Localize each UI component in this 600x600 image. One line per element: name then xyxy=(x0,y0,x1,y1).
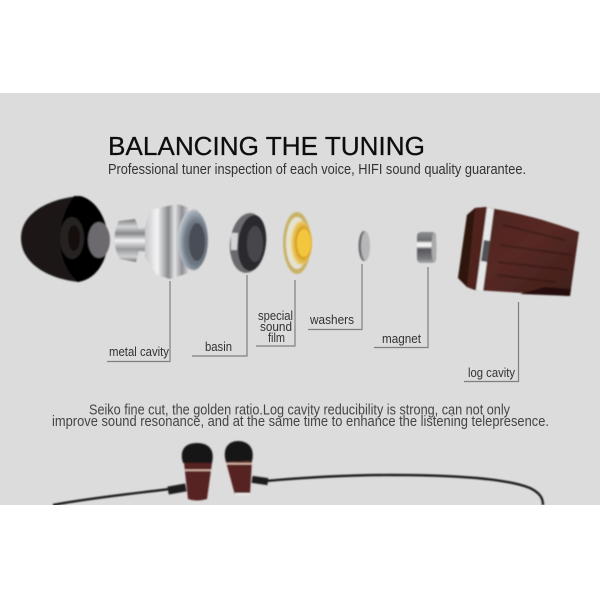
description text: improve sound resonance, and at the same time to enhance the listening telepresence. xyxy=(52,414,549,430)
grey panel xyxy=(0,93,600,505)
earphones photo xyxy=(53,441,543,505)
icon: washers xyxy=(358,231,370,261)
callout: special sound film: sound xyxy=(260,320,292,334)
icon: silicone ear tip xyxy=(21,196,110,282)
left band xyxy=(184,470,211,471)
icon: special sound film xyxy=(283,212,312,274)
bottom white strip xyxy=(0,505,600,600)
right wood body xyxy=(226,461,252,495)
right band xyxy=(226,463,252,464)
callout: magnet xyxy=(374,267,428,348)
left ear tip xyxy=(182,443,213,463)
callout: metal cavity xyxy=(107,281,170,362)
icon: magnet xyxy=(417,232,436,263)
callout: special sound film: film xyxy=(268,331,285,345)
callout: special sound film xyxy=(256,280,295,346)
right stem xyxy=(252,476,268,485)
callout: basin xyxy=(192,275,247,356)
callout: metal cavity: metal cavity xyxy=(109,345,170,359)
callout: magnet: magnet xyxy=(382,332,421,346)
description text xyxy=(52,402,549,430)
callout: log cavity: log cavity xyxy=(468,366,516,380)
right base highlight xyxy=(235,493,250,495)
callout: washers: washers xyxy=(309,313,354,327)
description text: Seiko fine cut, the golden ratio.Log cavity reducibility is strong, can not only xyxy=(89,402,511,418)
right ear tip xyxy=(225,441,253,462)
callout: washers xyxy=(308,264,362,330)
left wood body xyxy=(184,463,212,500)
callout: log cavity xyxy=(464,302,518,382)
subtitle: Professional tuner inspection of each voice, HIFI sound quality guarantee. xyxy=(108,161,526,178)
icon: basin xyxy=(227,211,269,275)
callout: basin: basin xyxy=(205,340,232,354)
title: BALANCING THE TUNING xyxy=(108,133,425,161)
left stem xyxy=(167,483,187,495)
cable xyxy=(53,475,543,505)
icon: log cavity xyxy=(458,207,579,296)
callout: special sound film: special xyxy=(258,309,293,323)
icon: metal cavity xyxy=(115,204,208,279)
